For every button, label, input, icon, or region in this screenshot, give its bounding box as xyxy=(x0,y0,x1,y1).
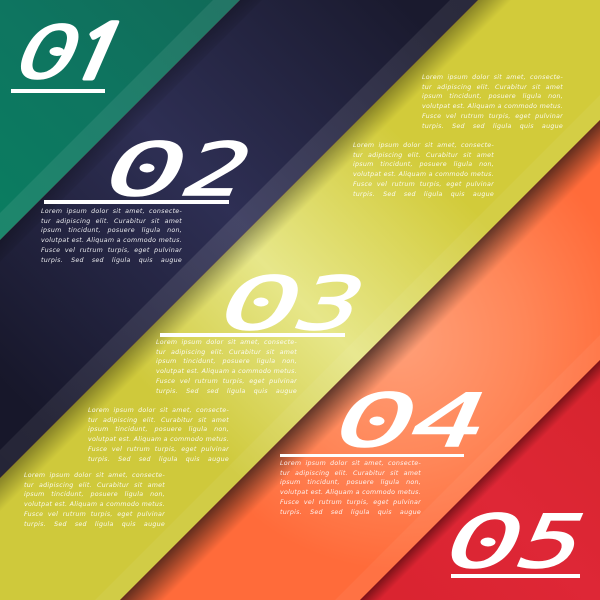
divider 05 xyxy=(451,574,580,578)
number 02: 2 xyxy=(168,128,268,213)
text block lower yellow left: ipsum tincidunt, posuere ligula non, xyxy=(24,491,165,498)
text block upper yellow xyxy=(353,142,494,198)
divider 03 xyxy=(160,333,345,336)
text block upper yellow: Fusce vel rutrum turpis, eget pulvinar xyxy=(353,181,494,188)
text block 04: Fusce vel rutrum turpis, eget pulvinar xyxy=(280,499,421,506)
text block lower yellow middle: volutpat est. Aliquam a commodo metus. xyxy=(88,436,229,443)
text block 04: turpis. Sed sed ligula quis augue xyxy=(280,509,421,516)
text block 02: turpis. Sed sed ligula quis augue xyxy=(41,257,182,264)
number 03: 0 xyxy=(203,261,319,347)
text block top right: tur adipiscing elit. Curabitur sit amet xyxy=(422,84,563,91)
divider 02 xyxy=(44,200,229,204)
number 04: 0 xyxy=(318,378,434,464)
text block 02: Lorem ipsum dolor sit amet, consecte- xyxy=(41,208,182,215)
text block lower yellow middle: ipsum tincidunt, posuere ligula non, xyxy=(88,426,229,433)
text block 03: ipsum tincidunt, posuere ligula non, xyxy=(156,358,297,365)
band: green xyxy=(0,0,240,240)
text block 02 xyxy=(41,208,182,264)
text block top right: ipsum tincidunt, posuere ligula non, xyxy=(422,93,563,100)
text block upper yellow: turpis. Sed sed ligula quis augue xyxy=(353,191,494,198)
text block upper yellow: Lorem ipsum dolor sit amet, consecte- xyxy=(353,142,494,149)
text block 02: ipsum tincidunt, posuere ligula non, xyxy=(41,227,182,234)
text block lower yellow left xyxy=(24,472,165,528)
number 02: 0 xyxy=(88,127,204,213)
text block 04 xyxy=(280,460,421,516)
text block 02: Fusce vel rutrum turpis, eget pulvinar xyxy=(41,247,182,254)
text block lower yellow middle: Lorem ipsum dolor sit amet, consecte- xyxy=(88,407,229,414)
band: red xyxy=(360,360,600,600)
text block 03: tur adipiscing elit. Curabitur sit amet xyxy=(156,349,297,356)
number 01: 1 xyxy=(55,15,141,91)
text block lower yellow left: volutpat est. Aliquam a commodo metus. xyxy=(24,501,165,508)
text block lower yellow left: turpis. Sed sed ligula quis augue xyxy=(24,521,165,528)
number 05: 0 xyxy=(429,499,541,585)
text block top right: volutpat est. Aliquam a commodo metus. xyxy=(422,103,563,110)
text block lower yellow left: Lorem ipsum dolor sit amet, consecte- xyxy=(24,472,165,479)
text block 02: tur adipiscing elit. Curabitur sit amet xyxy=(41,218,182,225)
text block 04: ipsum tincidunt, posuere ligula non, xyxy=(280,479,421,486)
text block 03: volutpat est. Aliquam a commodo metus. xyxy=(156,368,297,375)
text block 04: volutpat est. Aliquam a commodo metus. xyxy=(280,489,421,496)
text block upper yellow: ipsum tincidunt, posuere ligula non, xyxy=(353,161,494,168)
text block lower yellow middle xyxy=(88,407,229,463)
text block 04: tur adipiscing elit. Curabitur sit amet xyxy=(280,470,421,477)
text block 02: volutpat est. Aliquam a commodo metus. xyxy=(41,237,182,244)
text block top right: Lorem ipsum dolor sit amet, consecte- xyxy=(422,74,563,81)
text block upper yellow: tur adipiscing elit. Curabitur sit amet xyxy=(353,152,494,159)
text block 03: Fusce vel rutrum turpis, eget pulvinar xyxy=(156,378,297,385)
band: navy xyxy=(0,0,478,478)
text block lower yellow middle: tur adipiscing elit. Curabitur sit amet xyxy=(88,417,229,424)
text block 03 xyxy=(156,339,297,395)
text block 04: Lorem ipsum dolor sit amet, consecte- xyxy=(280,460,421,467)
text block 03: Lorem ipsum dolor sit amet, consecte- xyxy=(156,339,297,346)
divider 04 xyxy=(280,454,464,457)
divider 01 xyxy=(11,89,105,92)
text block top right: Fusce vel rutrum turpis, eget pulvinar xyxy=(422,113,563,120)
number 03: 3 xyxy=(280,262,380,347)
band: orange xyxy=(120,120,600,600)
text block lower yellow middle: Fusce vel rutrum turpis, eget pulvinar xyxy=(88,446,229,453)
number 01: 0 xyxy=(0,10,98,96)
text block lower yellow left: Fusce vel rutrum turpis, eget pulvinar xyxy=(24,511,165,518)
text block 03: turpis. Sed sed ligula quis augue xyxy=(156,388,297,395)
text block lower yellow left: tur adipiscing elit. Curabitur sit amet xyxy=(24,482,165,489)
number 04: 4 xyxy=(394,378,506,464)
text block top right xyxy=(422,74,563,130)
text block upper yellow: volutpat est. Aliquam a commodo metus. xyxy=(353,171,494,178)
number 05: 5 xyxy=(502,500,600,585)
text block top right: turpis. Sed sed ligula quis augue xyxy=(422,123,563,130)
text block lower yellow middle: turpis. Sed sed ligula quis augue xyxy=(88,456,229,463)
